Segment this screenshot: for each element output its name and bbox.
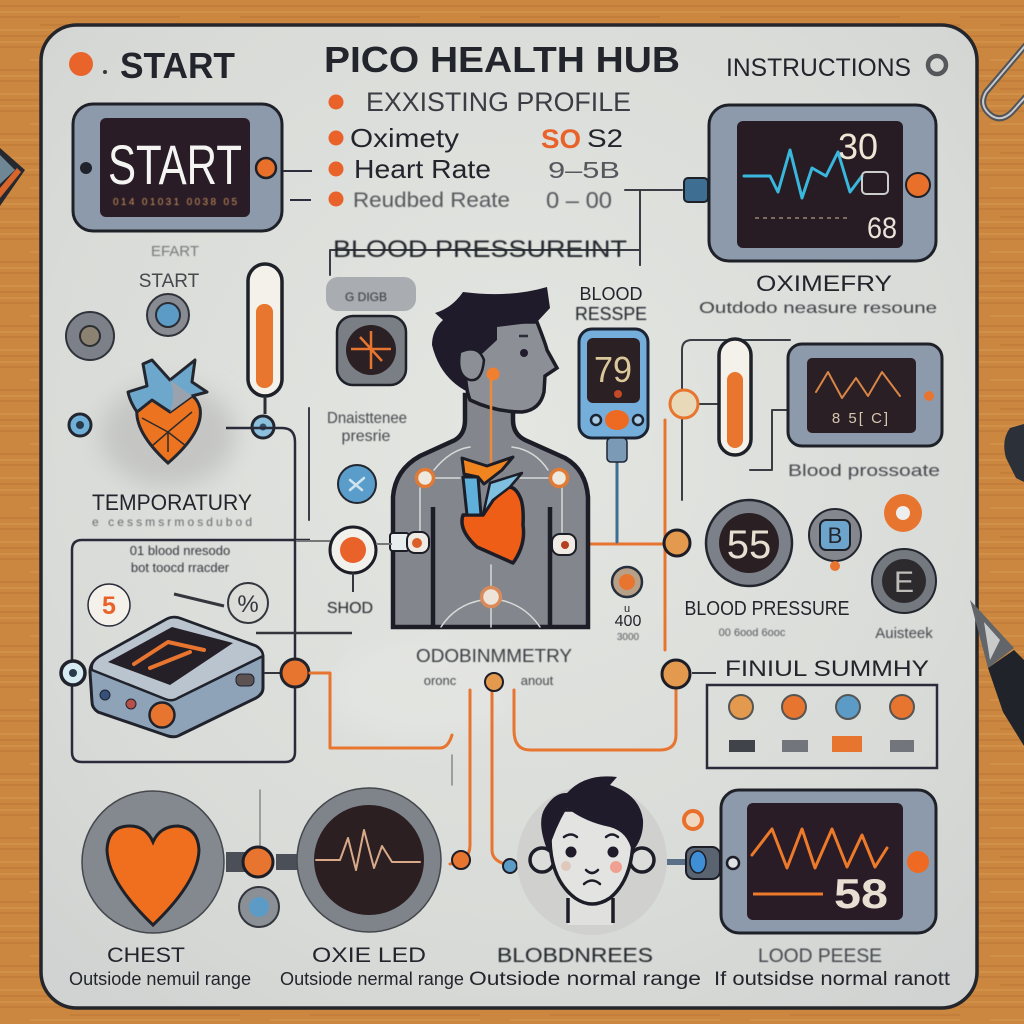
bottom captions: LOOD PEESE — [758, 946, 882, 967]
temporary label — [92, 490, 252, 529]
desk item: marker cap — [1004, 424, 1024, 482]
blood pressure label right — [684, 598, 933, 642]
oximetry monitor top right: 68 — [867, 212, 897, 245]
profile list: SO — [541, 124, 581, 154]
bottom captions — [69, 944, 951, 990]
blood pressure monitor right: 8 5[ C] — [832, 410, 890, 427]
oximetry monitor top right — [684, 105, 936, 261]
oximetry center label — [416, 646, 572, 691]
profile list: Heart Rate — [354, 154, 491, 184]
start heading — [69, 45, 235, 86]
small reading: 400 — [615, 613, 641, 630]
bottom captions: If outsidse normal ranott — [714, 969, 951, 990]
temporary label: TEMPORATURY — [92, 490, 252, 515]
bottom captions: Outsiode nermal range — [280, 969, 464, 989]
readout dials: 55 — [727, 523, 771, 567]
pressure caption: presrie — [342, 428, 391, 445]
start device: START — [108, 133, 242, 196]
blood pressure heading: BLOOD PRESSUREINT — [333, 236, 627, 263]
temporary label: e cessmsrmosdubod — [92, 515, 252, 529]
person with heart — [390, 287, 588, 627]
device box panel — [61, 428, 352, 762]
blood pressure label right: BLOOD PRESSURE — [684, 598, 850, 620]
profile list: 9–5B — [548, 157, 620, 183]
small orange badge — [684, 811, 702, 829]
bottom captions: Outsiode nemuil range — [69, 969, 251, 989]
blood pressure side label: RESSPE — [575, 304, 647, 324]
profile list: Oximety — [350, 123, 459, 153]
handheld blood pressure device: 79 — [594, 349, 632, 390]
readout dials: E — [894, 566, 914, 599]
oximetry center label: anout — [521, 673, 554, 688]
connectors between icons — [226, 847, 517, 927]
blood pressure label right: 00 6ood 6ooc — [719, 627, 786, 639]
wiring — [260, 190, 790, 866]
blood pressure monitor caption: Blood prossoate — [788, 461, 940, 480]
shod node: SHOD — [327, 600, 373, 617]
device box panel: 5 — [102, 592, 116, 620]
heart icon left — [69, 360, 207, 463]
desk item: pen — [970, 600, 1024, 746]
start buttons — [66, 294, 189, 360]
worried face — [517, 776, 667, 935]
small reading: 3000 — [617, 632, 640, 643]
oximetry label — [699, 271, 937, 317]
bottom captions: Outsiode normal range — [469, 969, 701, 990]
profile list: S2 — [587, 125, 623, 153]
start heading: START — [120, 45, 235, 86]
bottom right monitor: 58 — [834, 870, 888, 917]
small reading — [612, 567, 642, 643]
desk item: left clip — [0, 148, 25, 206]
pressure caption — [327, 410, 407, 445]
profile list: Reudbed Reate — [353, 189, 510, 212]
device box panel: % — [237, 591, 259, 618]
pressure caption: Dnaisttenee — [327, 410, 407, 427]
title: PICO HEALTH HUB — [324, 39, 680, 80]
chest icon — [82, 791, 224, 933]
pressure gauge center left: G DIGB — [345, 290, 387, 304]
oximetry monitor top right: 30 — [838, 126, 878, 167]
instructions heading: INSTRUCTIONS — [726, 54, 911, 82]
oximetry center label: ODOBINMMETRY — [416, 646, 572, 666]
blood pressure side label: BLOOD — [579, 284, 643, 304]
device box panel: 01 blood nresodo — [130, 543, 230, 558]
small reading: u — [624, 603, 630, 615]
final summary: FINIUL SUMMHY — [725, 656, 929, 681]
blood pressure side label — [575, 284, 647, 324]
start device: 014 01031 0038 05 — [113, 197, 237, 208]
final summary — [662, 656, 937, 768]
blue button — [338, 465, 376, 503]
bottom captions: BLOBDNREES — [497, 945, 653, 967]
connector node — [664, 530, 690, 556]
oximetry label: OXIMEFRY — [756, 271, 892, 296]
readout dials: B — [828, 523, 842, 548]
oximetry label: Outdodo neasure resoune — [699, 300, 937, 317]
shod node — [296, 527, 392, 617]
blood pressure monitor right — [788, 344, 942, 446]
start labels: EFART — [151, 243, 199, 260]
profile list: 0 – 00 — [546, 187, 612, 213]
blood pressure label right: Auisteek — [875, 625, 933, 642]
bottom right monitor — [667, 790, 936, 933]
desk item: paper clip — [983, 40, 1024, 118]
oxie led dial — [297, 788, 441, 932]
thermometer left — [248, 264, 282, 438]
bottom captions: OXIE LED — [312, 944, 426, 967]
readout dials — [706, 494, 936, 613]
handheld blood pressure device — [579, 329, 648, 462]
start labels — [139, 243, 200, 292]
oximetry center label: oronc — [424, 673, 457, 688]
profile list: EXXISTING PROFILE — [366, 87, 631, 117]
pressure gauge center left — [326, 277, 416, 385]
device box panel: bot toocd rracder — [131, 560, 230, 575]
start device — [73, 104, 312, 231]
start labels: START — [139, 271, 200, 292]
profile list — [328, 87, 631, 213]
thermometer right and node — [670, 339, 751, 455]
bottom captions: CHEST — [107, 944, 185, 967]
